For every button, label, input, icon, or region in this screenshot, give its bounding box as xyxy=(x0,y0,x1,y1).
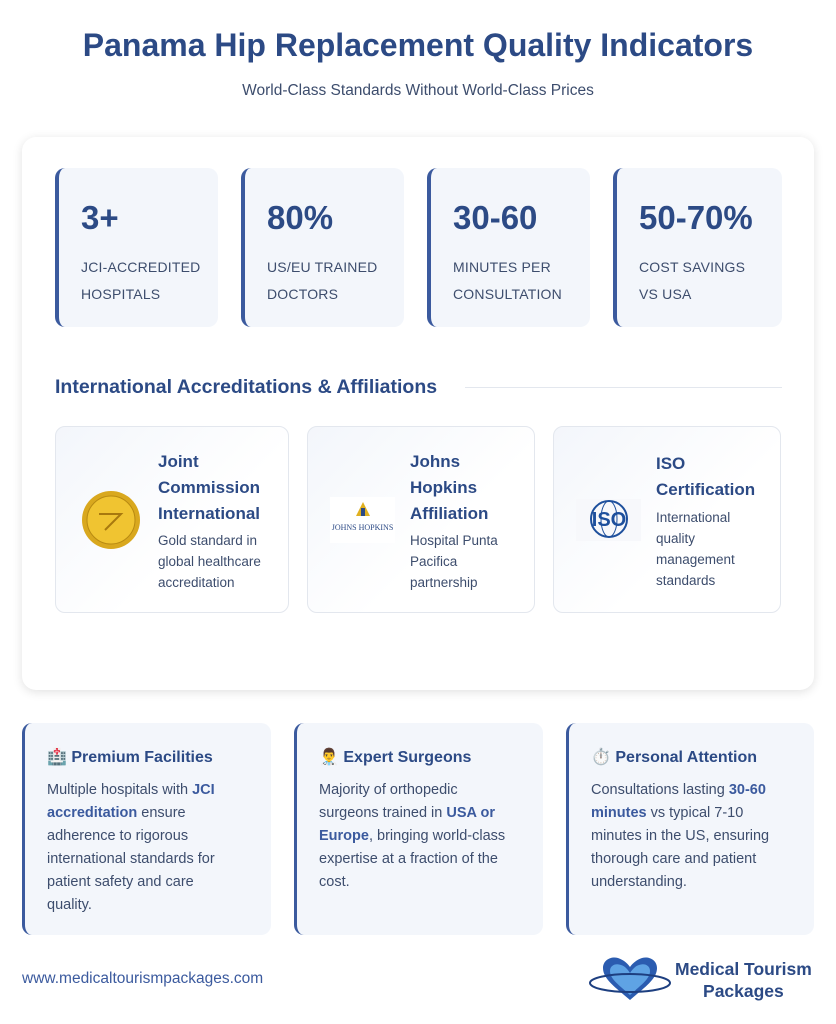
panel: main xyxy=(22,137,814,690)
card: expert surgeons: Europe, bringing world-class xyxy=(319,828,505,844)
footer logo: Medical Tourism xyxy=(675,959,812,979)
card: expert surgeons: 👨‍⚕️ Expert Surgeons xyxy=(319,749,471,766)
card: personal attention: minutes in the US, ensuring xyxy=(591,828,769,844)
card: premium facilities: patient safety and care xyxy=(47,874,194,890)
card: premium facilities: 🏥 Premium Facilities xyxy=(47,749,213,766)
card: Johns Hopkins: Hospital Punta xyxy=(410,533,498,548)
card: JCI: Commission xyxy=(158,478,260,497)
card: Johns Hopkins xyxy=(307,426,535,613)
footer logo xyxy=(589,958,812,1001)
stat: consultation: 30-60 xyxy=(453,199,537,236)
card: ISO xyxy=(553,426,781,613)
card: personal attention: Consultations lasting 30-60 xyxy=(591,782,766,798)
card: Johns Hopkins: Affiliation xyxy=(410,504,488,523)
subtitle: World-Class Standards Without World-Class Prices xyxy=(242,82,594,99)
card: JCI: accreditation xyxy=(158,575,235,590)
stat: savings: VS USA xyxy=(639,286,692,302)
card: premium facilities: Multiple hospitals with JCI xyxy=(47,782,215,798)
stat: doctors: US/EU TRAINED xyxy=(267,259,377,275)
stat: hospitals xyxy=(55,168,218,327)
card: ISO: standards xyxy=(656,573,715,588)
card: expert surgeons: Majority of orthopedic xyxy=(319,782,458,798)
card: personal attention: understanding. xyxy=(591,874,687,890)
card: expert surgeons: surgeons trained in USA or xyxy=(319,805,495,821)
title: Panama Hip Replacement Quality Indicators xyxy=(83,27,753,63)
card: JCI: global healthcare xyxy=(158,554,261,569)
icon: gold seal xyxy=(82,491,140,549)
stat: doctors: DOCTORS xyxy=(267,286,338,302)
stat: savings xyxy=(613,168,782,327)
card: JCI xyxy=(55,426,289,613)
card: premium facilities: quality. xyxy=(47,897,92,913)
stat: hospitals: 3+ xyxy=(81,199,119,236)
footer url: www.medicaltourismpackages.com xyxy=(22,970,263,987)
card: JCI: International xyxy=(158,504,260,523)
stat: consultation: CONSULTATION xyxy=(453,286,562,302)
card: expert surgeons: expertise at a fraction of the xyxy=(319,851,498,867)
stat: hospitals: JCI-ACCREDITED xyxy=(81,259,200,275)
card: personal attention: ⏱️ Personal Attention xyxy=(591,749,757,766)
card: expert surgeons xyxy=(294,723,543,935)
icon: heart plane xyxy=(589,958,671,1000)
card: Johns Hopkins: Johns xyxy=(410,452,460,471)
card: ISO: International xyxy=(656,510,730,525)
stat: hospitals: HOSPITALS xyxy=(81,286,160,302)
card: ISO: management xyxy=(656,552,735,567)
card: expert surgeons: cost. xyxy=(319,874,350,890)
card: JCI: Gold standard in xyxy=(158,533,257,548)
card: personal attention: minutes vs typical 7-10 xyxy=(591,805,743,821)
card: premium facilities: adherence to rigorous xyxy=(47,828,188,844)
card: ISO: ISO xyxy=(656,454,685,473)
card: Johns Hopkins: Pacifica xyxy=(410,554,457,569)
stat: doctors: 80% xyxy=(267,199,333,236)
card: premium facilities: international standards for xyxy=(47,851,215,867)
stat: consultation xyxy=(427,168,590,327)
icon: johns hopkins logo: JOHNS HOPKINS xyxy=(332,523,393,532)
stat: savings: COST SAVINGS xyxy=(639,259,745,275)
icon: johns hopkins logo xyxy=(330,497,395,543)
footer logo: Packages xyxy=(703,981,784,1001)
stat: savings: 50-70% xyxy=(639,199,753,236)
card: JCI: Joint xyxy=(158,452,199,471)
card: ISO: quality xyxy=(656,531,695,546)
icon: ISO logo xyxy=(576,499,641,541)
stat: consultation: MINUTES PER xyxy=(453,259,551,275)
card: premium facilities xyxy=(22,723,271,935)
section heading: International Accreditations & Affiliations xyxy=(55,376,437,398)
card: premium facilities: accreditation ensure xyxy=(47,805,186,821)
icon: ISO logo: ISO xyxy=(591,509,626,531)
card: Johns Hopkins: Hopkins xyxy=(410,478,477,497)
stat: doctors xyxy=(241,168,404,327)
card: personal attention xyxy=(566,723,814,935)
card: Johns Hopkins: partnership xyxy=(410,575,478,590)
card: personal attention: thorough care and patient xyxy=(591,851,756,867)
card: ISO: Certification xyxy=(656,480,755,499)
